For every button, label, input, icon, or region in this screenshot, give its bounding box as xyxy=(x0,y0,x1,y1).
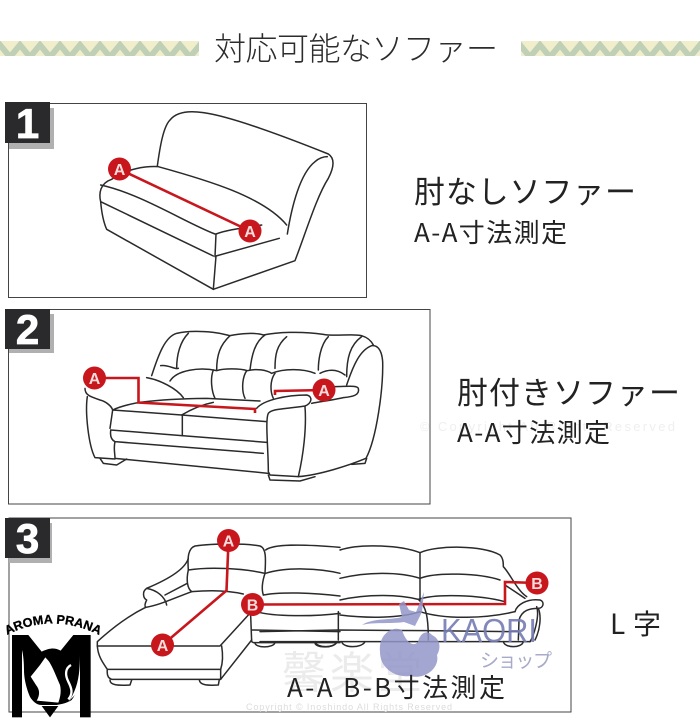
logo brand arc text: AROMA PRANA xyxy=(6,614,100,636)
red A-A measure line: A xyxy=(244,224,256,241)
panel frame xyxy=(9,518,571,712)
panel frame xyxy=(8,310,430,504)
number badge 3 xyxy=(5,515,52,563)
sofa type name: 肘付きソファー xyxy=(457,368,680,413)
number badge 2: 2 xyxy=(16,306,39,353)
number badge 1 xyxy=(5,100,54,149)
KAORI watermark: KAORI xyxy=(441,612,537,649)
red A-A measure line: A xyxy=(89,371,101,388)
faint kanji watermark: 馨楽堂 xyxy=(282,649,422,698)
measure note: A-A B-B寸法測定 xyxy=(287,668,505,705)
armed sofa drawing xyxy=(85,331,383,481)
faint copyright: © Copyright All Rights Reserved xyxy=(420,419,675,434)
logo M and cat mark xyxy=(12,635,91,717)
label 1 xyxy=(414,167,636,250)
number badge 3: 3 xyxy=(16,515,39,562)
red A-A measure line: A xyxy=(157,638,169,655)
red A-A measure line: A xyxy=(114,162,126,179)
panel 1: armless sofa xyxy=(5,100,366,298)
left chevron strip xyxy=(0,41,199,56)
number badge 1: 1 xyxy=(16,100,39,147)
L-shaped sofa drawing, right part xyxy=(340,546,543,640)
L-shaped sofa drawing, left part xyxy=(97,544,340,685)
red A-A measure line: A xyxy=(318,383,330,400)
header band xyxy=(0,24,700,70)
L-shaped sofa base and feet xyxy=(260,607,538,647)
red B-B measure line xyxy=(241,572,548,616)
red A-A measure line: A xyxy=(223,534,235,550)
measure note: A-A寸法測定 xyxy=(457,413,610,450)
red B-B measure line: B xyxy=(247,598,258,614)
right chevron strip xyxy=(521,41,700,56)
shop watermark xyxy=(362,592,552,677)
red A-A measure line xyxy=(151,529,240,656)
faint copyright text: Copyright © Inoshindo All Rights Reserved xyxy=(246,702,452,712)
label 2 xyxy=(457,368,680,450)
shop label watermark: ショップ xyxy=(480,650,552,672)
panel frame xyxy=(8,104,366,298)
watermark blob and dancer xyxy=(362,592,439,677)
panel 3: L-shaped sofa xyxy=(5,515,571,712)
title: 対応可能なソファー xyxy=(214,24,498,70)
sofa type name: 肘なしソファー xyxy=(414,167,636,212)
number badge 2 xyxy=(5,306,54,353)
label 3: L字 xyxy=(610,603,661,643)
AROMA PRANA logo xyxy=(6,614,100,718)
red B-B measure line: B xyxy=(531,576,543,593)
panel 2: sofa with arms xyxy=(5,306,675,504)
red A-A measure line xyxy=(83,366,336,413)
red A-A measure line xyxy=(108,158,262,242)
measure note: A-A寸法測定 xyxy=(414,213,567,250)
armless sofa drawing xyxy=(100,112,333,289)
